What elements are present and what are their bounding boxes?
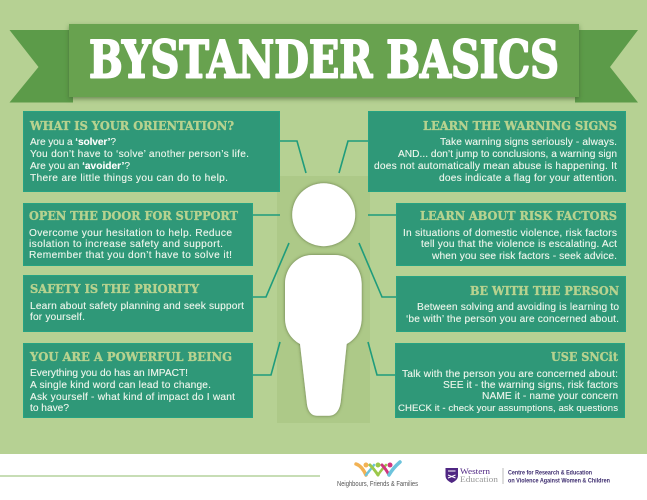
text block: Learn about safety planning and seek support bbox=[30, 301, 244, 312]
panel: be with the person bbox=[396, 276, 626, 332]
logo: western education: Education bbox=[460, 474, 499, 484]
text block: tell you that the violence is escalating. Act bbox=[421, 239, 617, 250]
banner right tail bbox=[575, 30, 638, 102]
heading: LEARN THE WARNING SIGNS bbox=[423, 119, 617, 133]
heading: USE SNCit bbox=[551, 350, 618, 364]
heading: LEARN ABOUT RISK FACTORS bbox=[420, 209, 617, 223]
logo: western education: on Violence Against Women & Children bbox=[508, 478, 610, 484]
person figure bbox=[285, 183, 362, 416]
heading: WHAT IS YOUR ORIENTATION? bbox=[29, 119, 234, 133]
logo: western education bbox=[446, 466, 610, 484]
text block: when you see risk factors - seek advice. bbox=[431, 251, 617, 262]
panel: open the door for support bbox=[24, 204, 252, 266]
text block: There are little things you can do to help. bbox=[30, 173, 228, 184]
text block bbox=[374, 137, 617, 184]
text block: for yourself. bbox=[30, 312, 85, 323]
text block: to have? bbox=[30, 403, 69, 414]
text block: Between solving and avoiding is learning to bbox=[417, 302, 619, 313]
text block bbox=[406, 302, 619, 325]
text block: In situations of domestic violence, risk factors bbox=[403, 228, 617, 239]
text block: Overcome your hesitation to help. Reduce bbox=[29, 228, 232, 239]
text block: does indicate a flag for your attention. bbox=[439, 173, 617, 184]
panel: use sncit bbox=[396, 344, 624, 418]
wordmark: Western bbox=[460, 466, 491, 476]
text block: Ask yourself - what kind of impact do I want bbox=[30, 392, 235, 403]
text block: Talk with the person you are concerned about: bbox=[402, 369, 618, 380]
head bbox=[292, 183, 355, 246]
footer bbox=[0, 454, 647, 500]
panel: you are a powerful being bbox=[24, 344, 252, 418]
text block bbox=[30, 368, 235, 414]
panel: learn about risk factors bbox=[396, 204, 626, 266]
text block: NAME it - name your concern bbox=[482, 391, 618, 402]
text block bbox=[398, 369, 618, 414]
heading: SAFETY IS THE PRIORITY bbox=[30, 282, 199, 296]
text block: does not automatically mean abuse is happening. It bbox=[374, 161, 617, 172]
figure backdrop bbox=[277, 176, 370, 423]
text block: You don’t have to ‘solve’ another person’s life. bbox=[30, 149, 249, 160]
heading: OPEN THE DOOR FOR SUPPORT bbox=[29, 209, 238, 223]
logo text: Neighbours, Friends & Families bbox=[337, 479, 418, 488]
panel: what is your orientation bbox=[24, 112, 280, 192]
text block: Are you a ‘solver’? bbox=[30, 137, 116, 148]
text block: Take warning signs seriously - always. bbox=[440, 137, 617, 148]
banner left tail bbox=[10, 30, 73, 102]
heading: BE WITH THE PERSON bbox=[470, 284, 619, 298]
text block: A single kind word can lead to change. bbox=[30, 380, 211, 391]
banner main bbox=[69, 24, 579, 97]
text block: AND... don’t jump to conclusions, a warning sign bbox=[398, 149, 617, 160]
text block: SEE it - the warning signs, risk factors bbox=[443, 380, 618, 391]
text block: Everything you do has an IMPACT! bbox=[30, 368, 188, 379]
body bbox=[285, 255, 362, 416]
text block: ‘be with’ the person you are concerned about. bbox=[406, 314, 619, 325]
icon: shield bbox=[446, 468, 458, 483]
logo: neighbours, friends and families bbox=[337, 462, 418, 488]
text block: Are you an ‘avoider’? bbox=[30, 161, 130, 172]
panel: learn the warning signs bbox=[368, 112, 626, 192]
title banner bbox=[10, 24, 638, 102]
text block bbox=[29, 228, 232, 261]
text block: Remember that you don’t have to solve it! bbox=[29, 250, 232, 261]
text block bbox=[30, 301, 244, 323]
panel: safety is the priority bbox=[24, 276, 252, 332]
text block: isolation to increase safety and support. bbox=[29, 239, 223, 250]
icon: people bbox=[356, 462, 400, 475]
heading: YOU ARE A POWERFUL BEING bbox=[29, 350, 232, 364]
connector lines bbox=[253, 141, 396, 375]
centre name: Centre for Research & Education bbox=[508, 470, 592, 476]
text block: CHECK it - check your assumptions, ask questions bbox=[398, 403, 618, 414]
text block bbox=[30, 137, 249, 184]
text block bbox=[403, 228, 617, 262]
